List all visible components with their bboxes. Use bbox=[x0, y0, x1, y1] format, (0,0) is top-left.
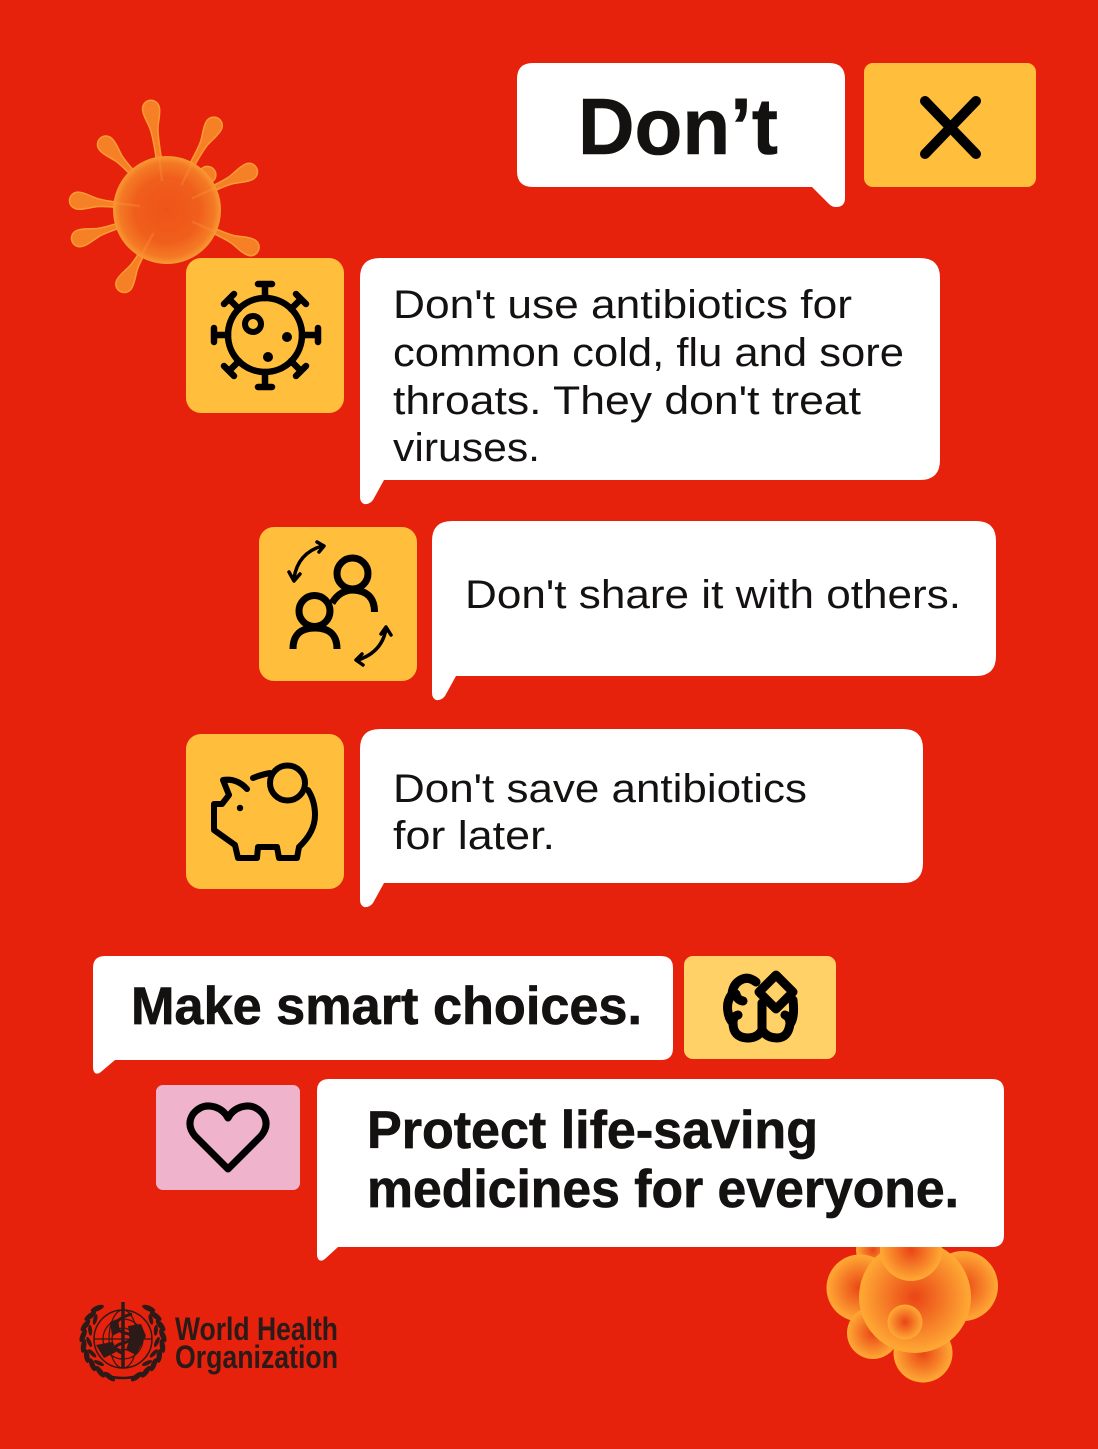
icon box: virus bbox=[186, 258, 344, 413]
heading: protect medicines: medicines for everyone. bbox=[367, 1160, 959, 1219]
bubble: common cold bbox=[360, 258, 940, 504]
organization name bbox=[175, 1311, 338, 1375]
emblem bbox=[78, 1302, 168, 1383]
heading: protect medicines: Protect life-saving bbox=[367, 1101, 818, 1160]
heading: smart choices: Make smart choices. bbox=[131, 977, 642, 1036]
icon box: heart bbox=[156, 1085, 300, 1190]
bubble: sharing bbox=[432, 521, 996, 700]
icon box: piggy bank bbox=[186, 734, 344, 889]
bubble: saving bbox=[360, 729, 923, 907]
X icon box bbox=[864, 63, 1036, 187]
text: antibiotics and viruses: common cold, flu and sore bbox=[393, 331, 904, 375]
virus illustration bbox=[69, 99, 262, 296]
text: sharing: Don't share it with others. bbox=[465, 573, 961, 617]
text: antibiotics and viruses bbox=[393, 283, 904, 470]
organization name: Organization bbox=[175, 1339, 338, 1375]
organization name: World Health bbox=[175, 1311, 338, 1347]
text: antibiotics and viruses: viruses. bbox=[393, 426, 540, 470]
text: antibiotics and viruses: Don't use antibiotics for bbox=[393, 283, 852, 327]
heading: protect medicines bbox=[367, 1101, 959, 1219]
text: saving bbox=[393, 767, 807, 858]
bubble: make smart choices bbox=[93, 956, 673, 1074]
text: saving: for later. bbox=[393, 814, 555, 858]
WHO logo bbox=[78, 1302, 338, 1383]
title bubble bbox=[517, 63, 845, 207]
text: saving: Don't save antibiotics bbox=[393, 767, 807, 811]
icon box: sharing people bbox=[259, 527, 417, 681]
title: Don’t bbox=[578, 82, 778, 171]
bubble: protect medicines bbox=[317, 1079, 1004, 1261]
icon box: brain bbox=[684, 956, 836, 1059]
text: antibiotics and viruses: throats. They don't treat bbox=[393, 379, 861, 423]
orange bubbles cluster bbox=[826, 1219, 998, 1382]
